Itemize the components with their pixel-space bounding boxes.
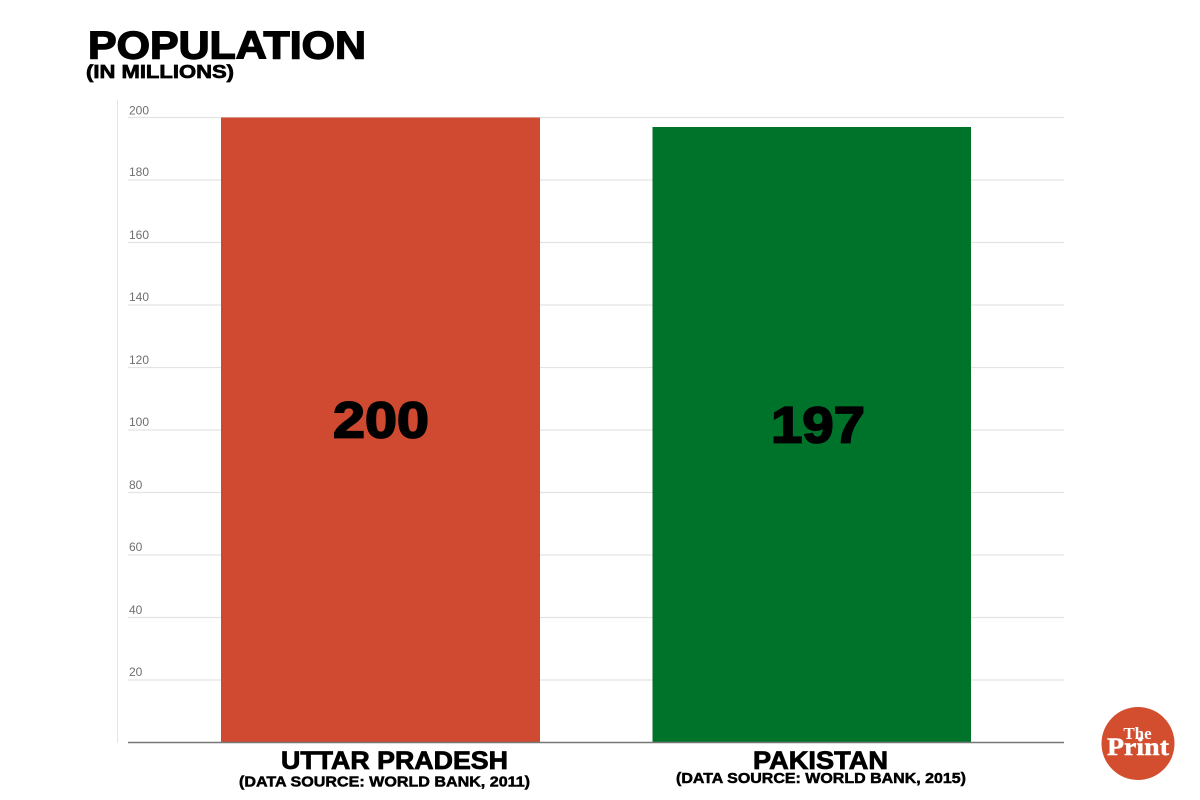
y-axis labels: 80 — [129, 478, 143, 492]
logo: The Print — [1102, 707, 1174, 780]
y-axis labels: 20 — [129, 665, 143, 679]
y-axis labels: 120 — [129, 353, 149, 367]
subtitle: (IN MILLIONS) — [86, 61, 234, 82]
y-axis labels: 180 — [129, 165, 149, 179]
bar chart — [118, 100, 1064, 743]
bar: Pakistan — [652, 127, 971, 742]
y-axis labels: 40 — [129, 603, 143, 617]
logo: The Print: Print — [1107, 734, 1170, 761]
y-axis labels: 60 — [129, 540, 143, 554]
y-axis labels: 100 — [129, 415, 149, 429]
source: Uttar Pradesh: (DATA SOURCE: WORLD BANK, 2011) — [239, 774, 530, 790]
title: POPULATION — [88, 24, 366, 68]
value: 197: 197 — [771, 396, 865, 454]
source: Pakistan: (DATA SOURCE: WORLD BANK, 2015) — [676, 771, 966, 787]
label: Uttar Pradesh: UTTAR PRADESH — [281, 747, 508, 775]
y-axis labels: 140 — [129, 290, 149, 304]
x-axis baseline — [128, 742, 1064, 744]
y-axis labels: 200 — [129, 104, 149, 118]
value: 200: 200 — [333, 392, 429, 448]
bar: Uttar Pradesh — [221, 118, 540, 742]
y-axis labels — [129, 104, 149, 679]
y-axis labels: 160 — [129, 228, 149, 242]
label: Pakistan: PAKISTAN — [753, 747, 888, 775]
logo: The Print: The — [1123, 724, 1152, 743]
